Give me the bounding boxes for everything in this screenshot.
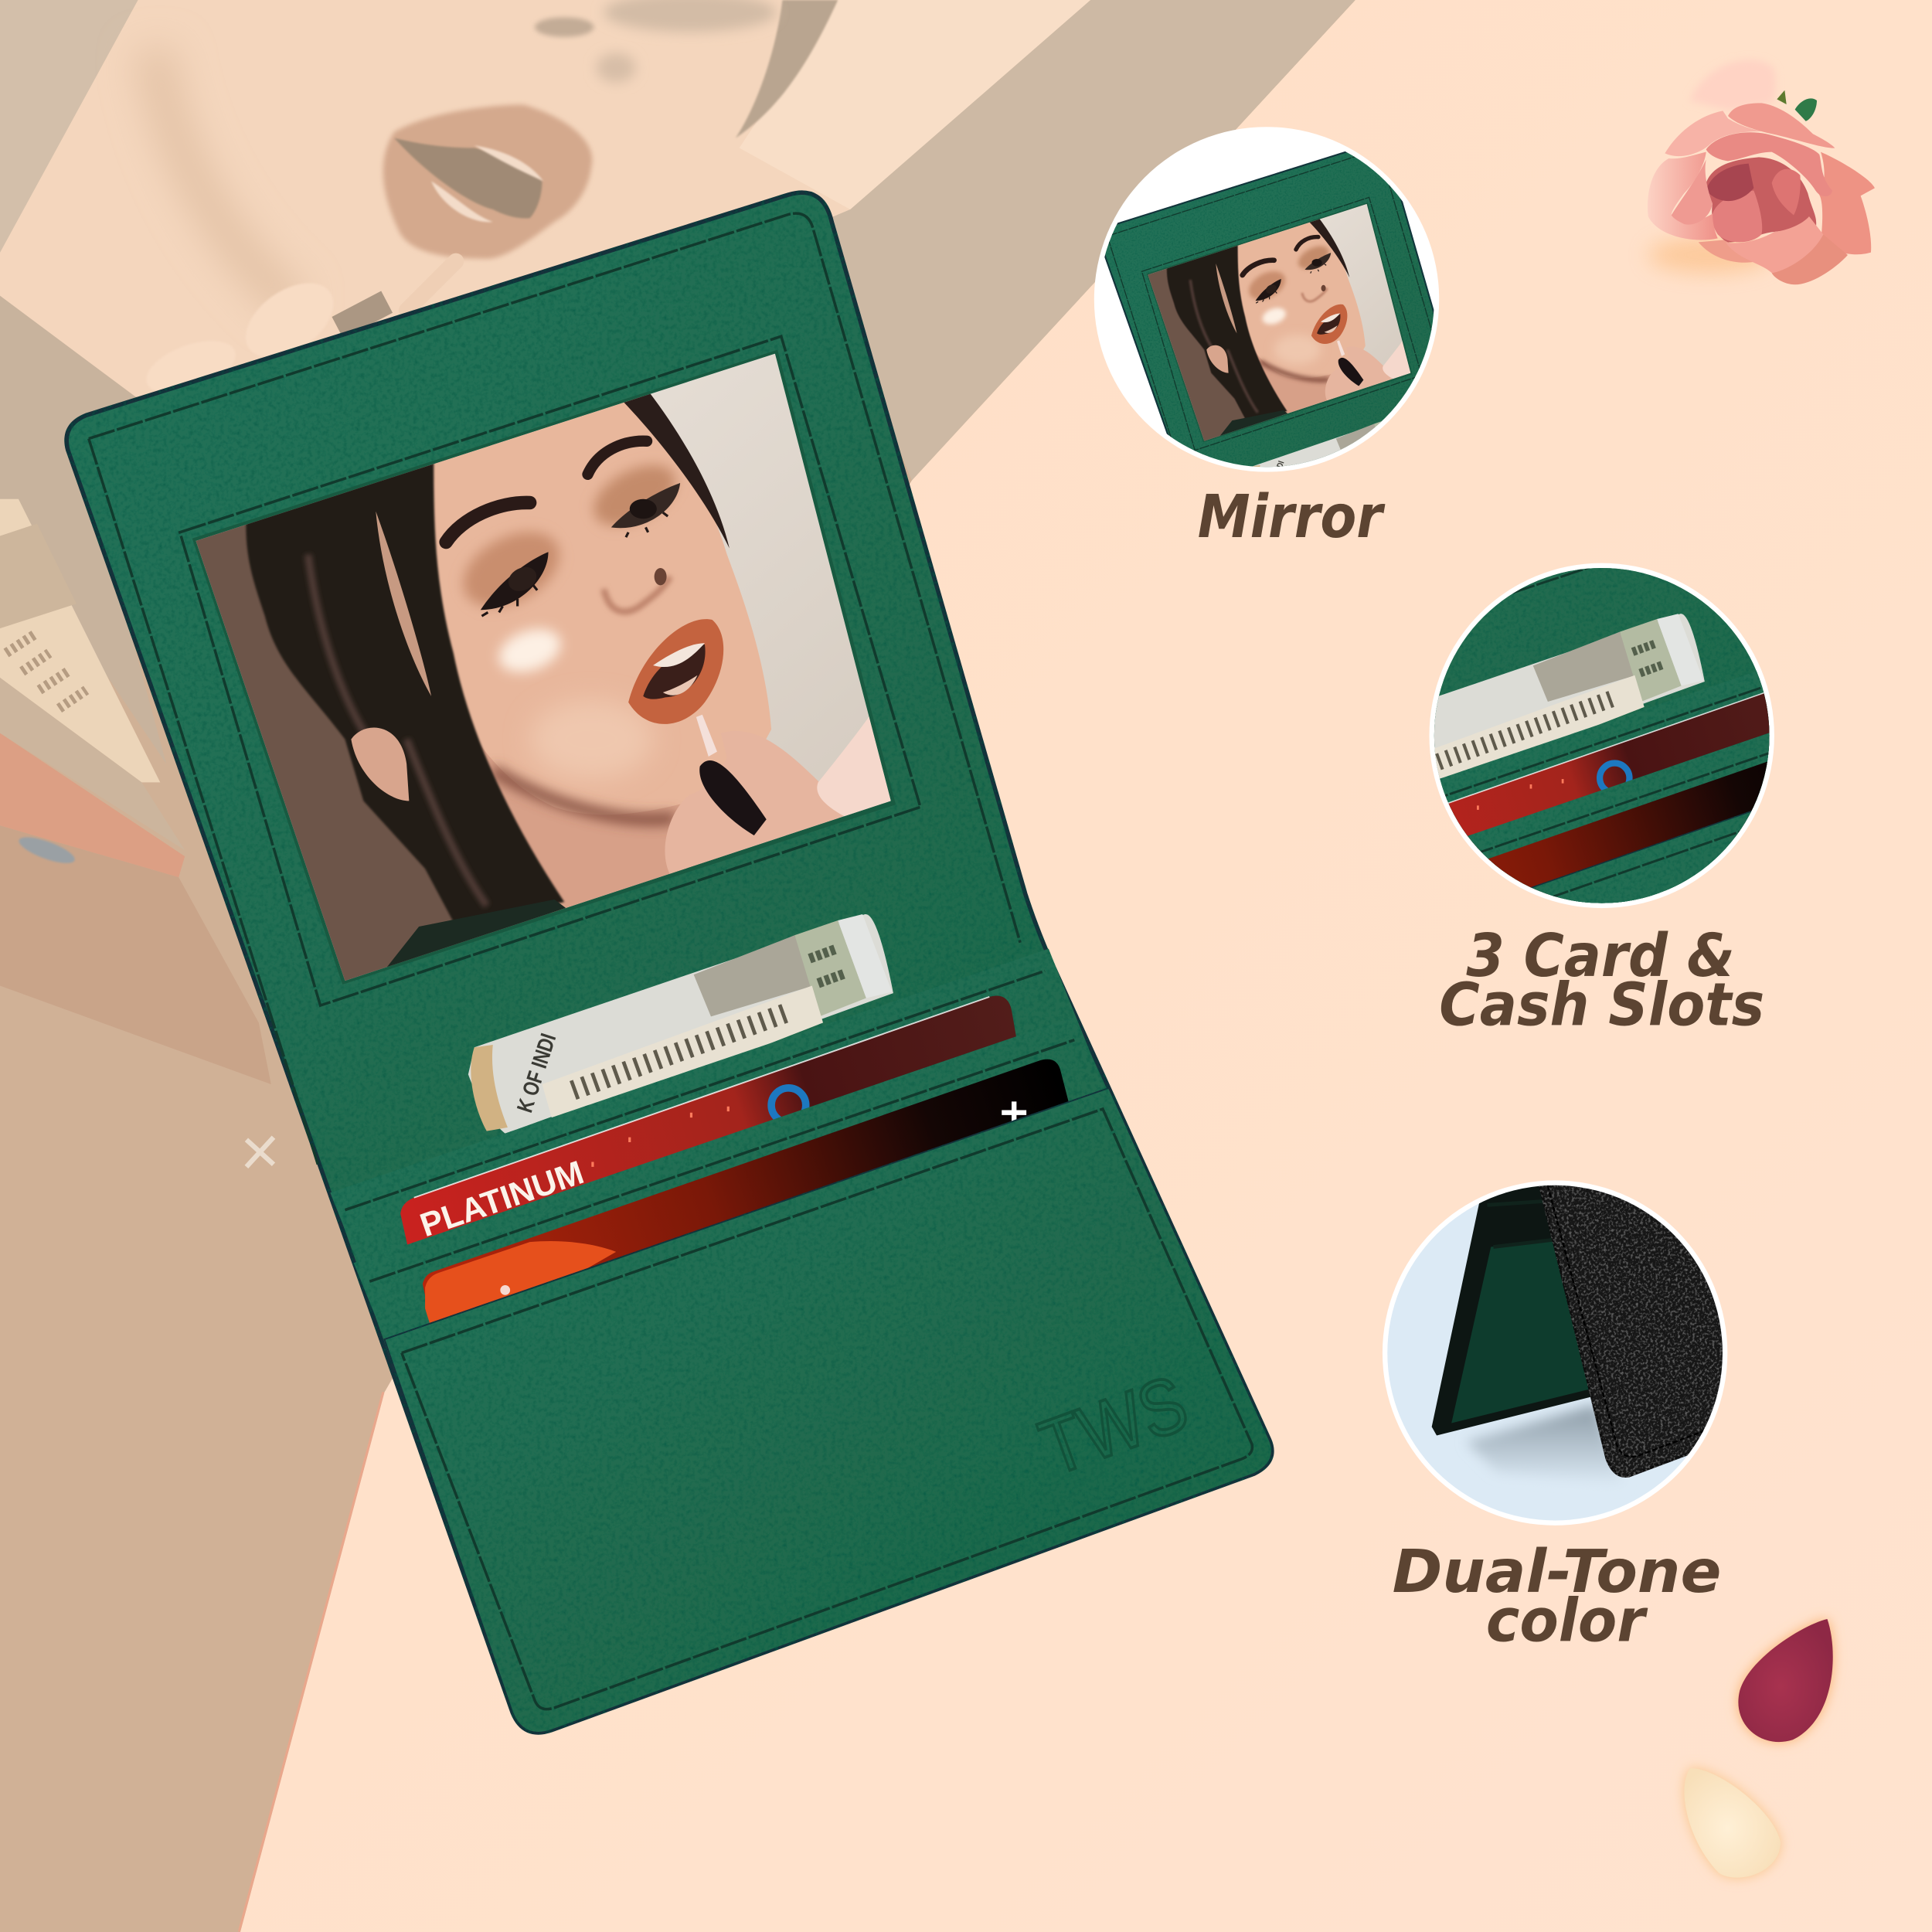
dark clothing — [369, 900, 579, 992]
decoration: cream makeup sponge — [1684, 1768, 1781, 1878]
ghost banknote — [0, 499, 160, 782]
rose centre — [1705, 157, 1816, 242]
eyes — [481, 552, 549, 610]
slots label line two: Cash Slots — [1439, 971, 1764, 1040]
eye shadow — [451, 517, 572, 622]
pocket one stitching — [345, 971, 1045, 1210]
eyebrows — [446, 502, 530, 543]
pocket two stitching — [369, 1040, 1074, 1281]
nose — [604, 577, 670, 612]
slots circle — [994, 0, 1932, 1318]
decoration: maroon makeup sponge — [1738, 1619, 1833, 1742]
dual tone label: Dual-Tone — [1393, 1538, 1721, 1607]
ghost cards — [0, 678, 274, 1167]
banknote: K OF INDI — [512, 1031, 561, 1115]
red platinum card: PLATINUM — [416, 1154, 588, 1244]
rose back petals — [1818, 152, 1875, 254]
dual tone label line two: color — [1486, 1587, 1648, 1656]
feature: dual tone colour — [1383, 1177, 1737, 1656]
mirror circle — [1094, 127, 1555, 725]
outer stitching — [89, 213, 1020, 1165]
front pocket panel — [384, 1088, 1272, 1733]
feature: card and cash slots — [994, 0, 1932, 1318]
black and red card — [423, 1060, 1072, 1337]
hand — [665, 731, 850, 877]
lips — [628, 619, 723, 724]
neck — [444, 727, 740, 918]
mirror reflection of a woman — [185, 345, 924, 998]
second hand — [817, 705, 906, 819]
mirror label: Mirror — [1198, 483, 1386, 552]
ghosted enlarged wallet background — [0, 0, 1478, 1932]
ear — [351, 727, 409, 801]
hair — [246, 451, 564, 927]
mirror window frame — [192, 350, 896, 985]
window stitching — [180, 336, 920, 1005]
ghost photo — [0, 0, 1090, 413]
slots label: 3 Card & — [1466, 922, 1735, 991]
card pocket one — [330, 949, 1257, 1725]
wallet body — [66, 192, 1272, 1733]
card pocket two — [354, 1016, 1257, 1725]
banknote — [468, 914, 893, 1134]
feature: mirror — [1094, 127, 1555, 725]
dual tone circle — [1383, 1177, 1737, 1526]
red platinum card — [400, 996, 1020, 1269]
lipstick — [696, 715, 717, 757]
main open wallet — [66, 192, 1272, 1733]
embossed brand logo: TWS — [1029, 1359, 1199, 1492]
front pocket stitching — [402, 1109, 1252, 1709]
decoration: rose — [1648, 60, 1875, 284]
face — [419, 384, 771, 815]
